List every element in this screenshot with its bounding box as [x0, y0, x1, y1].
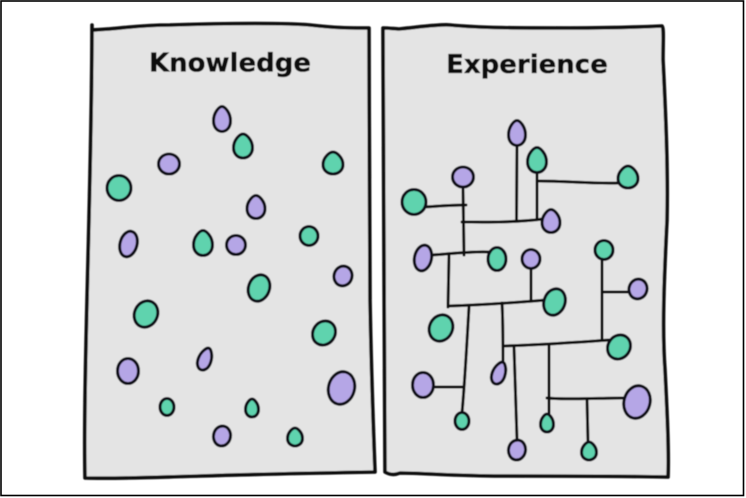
heading: Knowledge: Knowledge: [149, 48, 311, 78]
purple dots: experience: [412, 120, 654, 461]
panel outline: knowledge: [85, 24, 375, 478]
panel: knowledge: [85, 24, 375, 478]
green dots: experience: [402, 148, 638, 460]
panel outline: experience: [383, 25, 668, 477]
panel: experience: [383, 25, 668, 477]
purple dots: knowledge: [117, 106, 358, 447]
heading: Experience: Experience: [446, 50, 608, 80]
green dots: knowledge: [107, 134, 343, 446]
connector lines: [424, 140, 630, 443]
